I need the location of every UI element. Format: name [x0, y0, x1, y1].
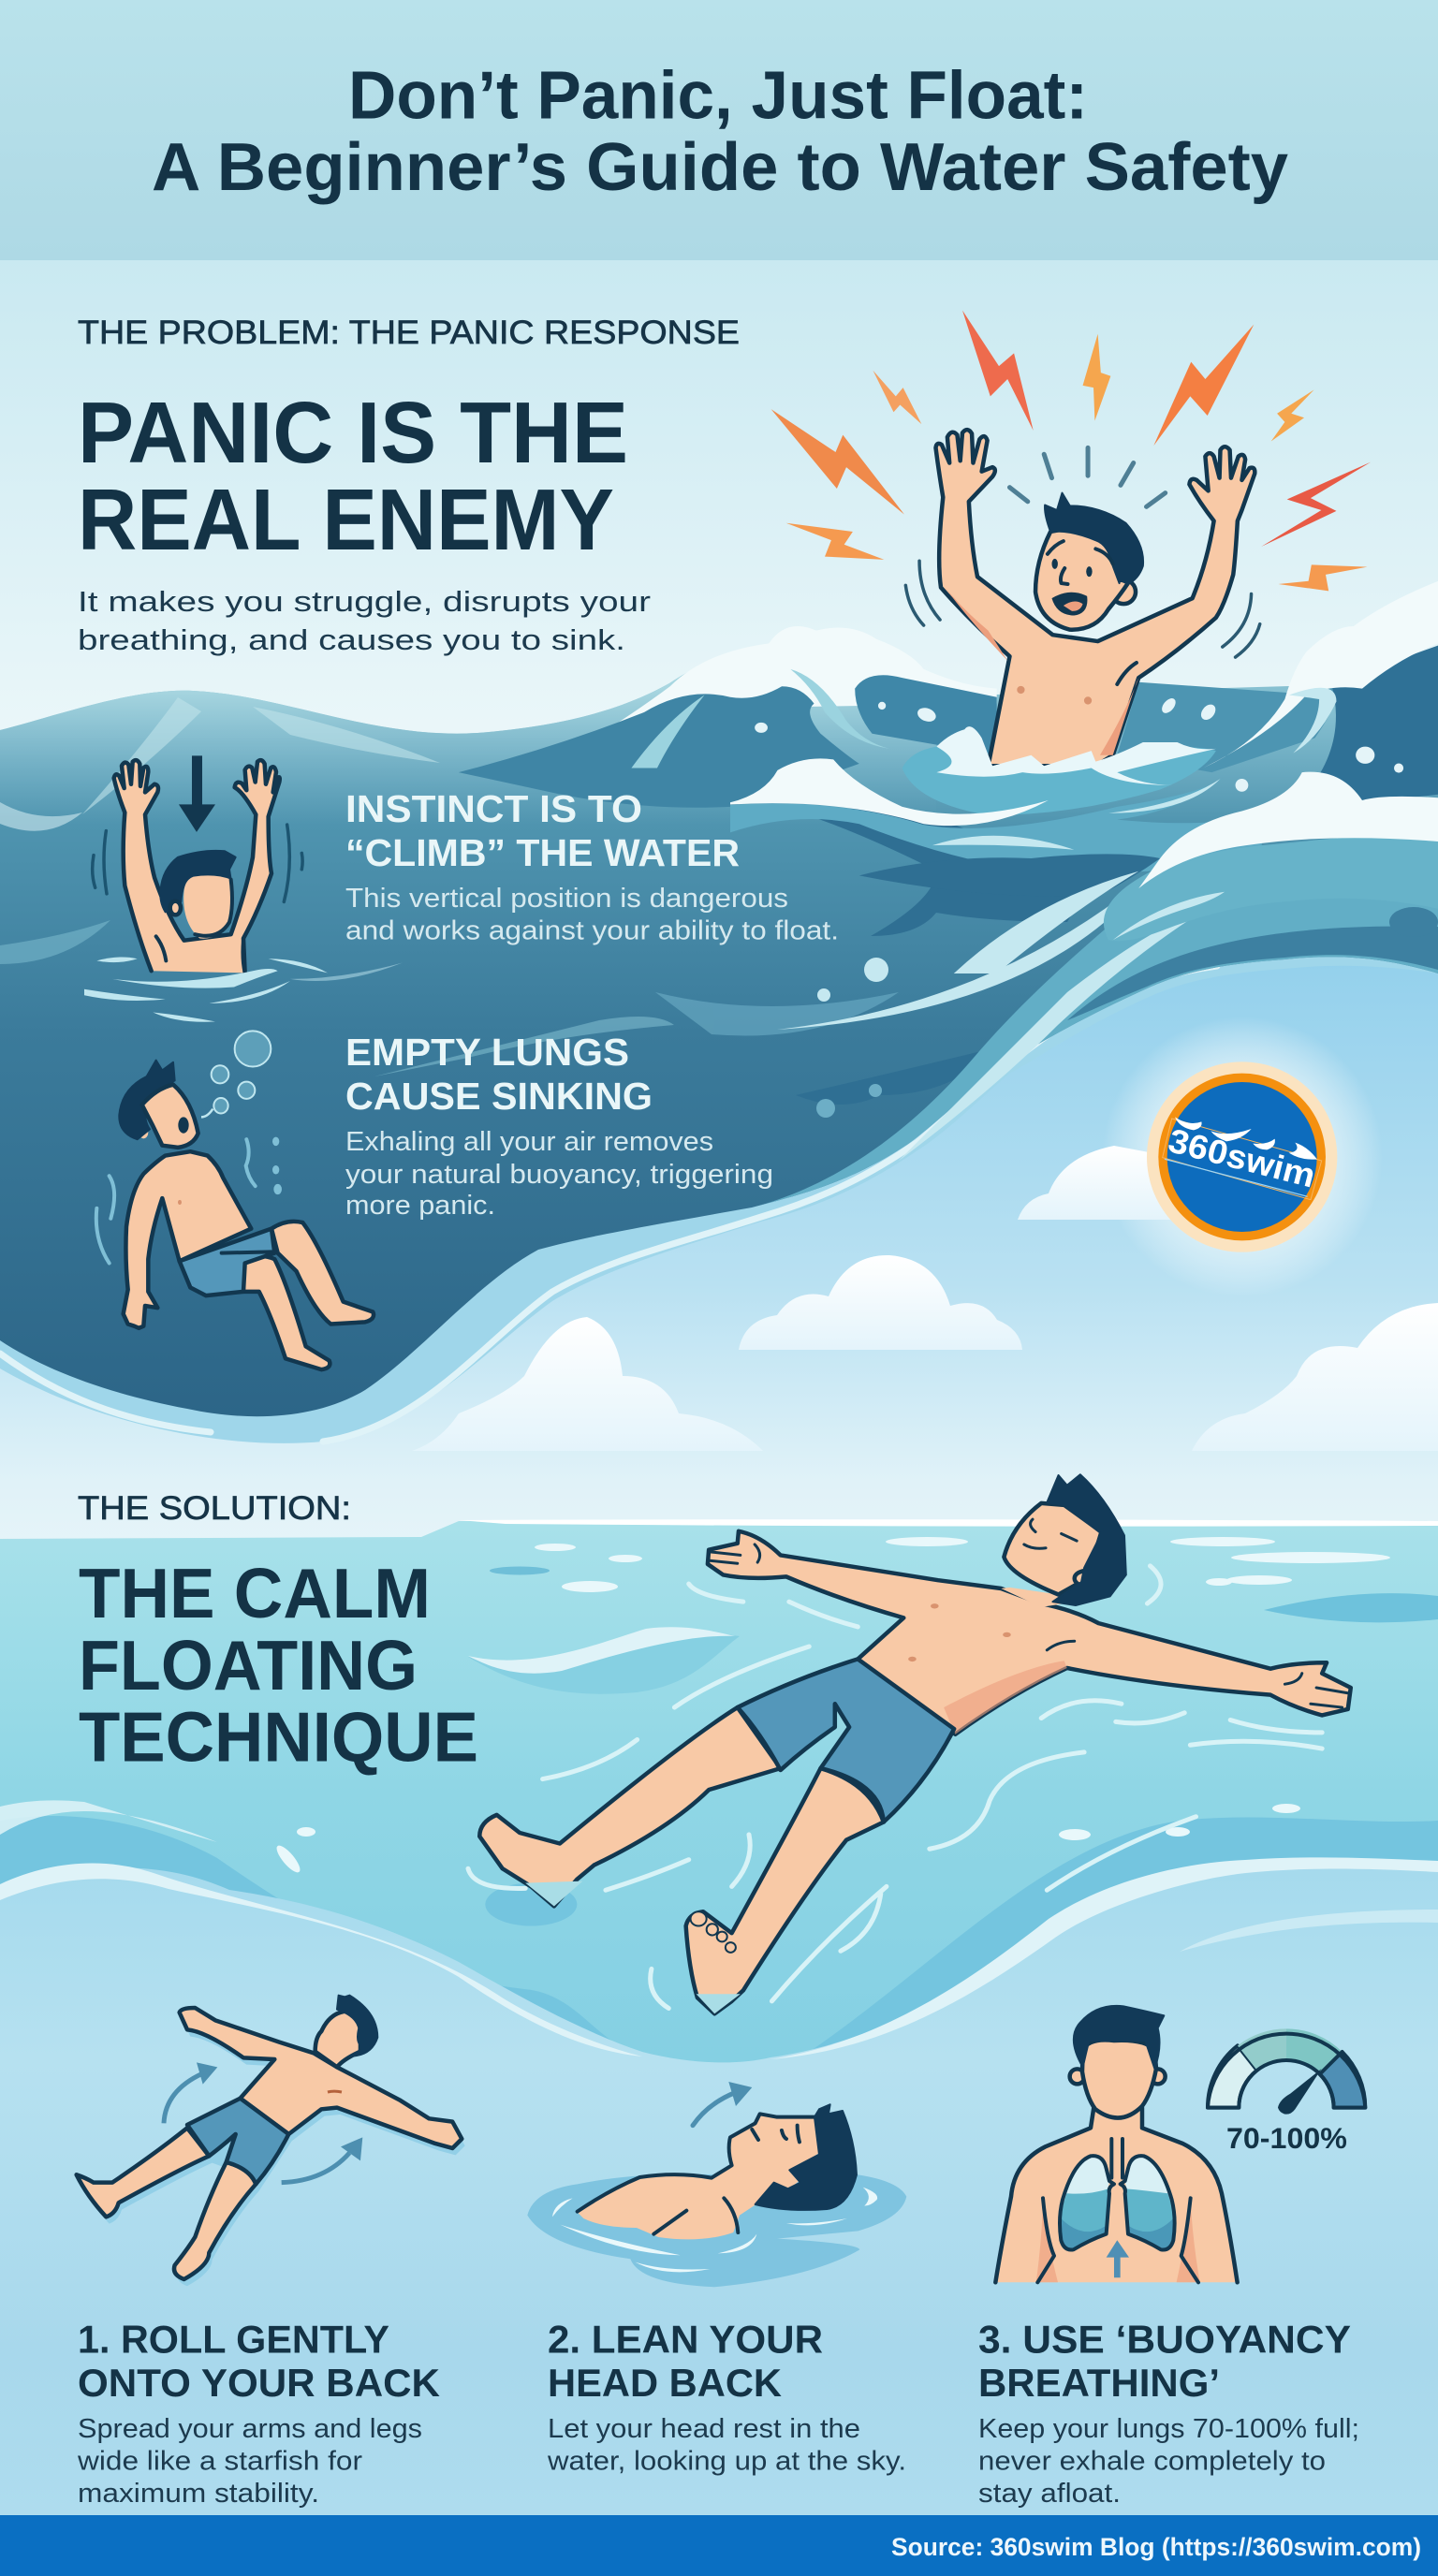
step 2 text: water, looking up at the sky.: [547, 2447, 906, 2477]
shoulder lines: [653, 2198, 738, 2234]
logo badge: 360swim: 360swim: [1165, 1120, 1319, 1195]
body and head: [578, 2114, 819, 2239]
instinct text block: INSTINCT IS TO: [345, 787, 642, 830]
arm lines: [1037, 2198, 1198, 2282]
second foot under water: [697, 1994, 741, 2013]
step 1 text: 1. ROLL GENTLY: [78, 2318, 389, 2361]
hair: [756, 2104, 857, 2210]
figure: empty lungs sinking: [96, 1031, 374, 1369]
torso and arm: [124, 1151, 251, 1328]
motion lines: [905, 561, 1260, 657]
gauge needle: [1278, 2069, 1322, 2115]
problem description: It makes you struggle, disrupts your: [78, 585, 651, 618]
left hill of wave: [0, 651, 936, 824]
empty lungs text block: your natural buoyancy, triggering: [345, 1160, 773, 1190]
panic figure: [730, 310, 1438, 973]
step 3 illustration: [995, 2006, 1365, 2282]
dark wave shapes: [796, 808, 1105, 1105]
sun glow: [1102, 1017, 1383, 1297]
right leg: [686, 1768, 884, 2013]
figure: climbing the water: [84, 755, 403, 1022]
shorts: [187, 2099, 288, 2184]
ear: [1075, 1571, 1100, 1587]
curved arrow 1: [164, 2062, 217, 2123]
face: [315, 2011, 361, 2067]
shorts fold: [222, 1251, 271, 1253]
solution eyebrow: THE SOLUTION:: [78, 1489, 351, 1527]
foot shadow: [485, 1883, 577, 1926]
step 1 text: [77, 2318, 440, 2509]
solution headline: [79, 1554, 478, 1777]
water swirls: [96, 1139, 256, 1263]
ear: [1111, 579, 1136, 604]
chest: [908, 1603, 1011, 1661]
outer wave white stripe: [0, 966, 1217, 1442]
lower leg: [242, 1256, 330, 1369]
empty lungs text block: CAUSE SINKING: [345, 1075, 653, 1118]
torso and arms: [708, 1531, 1351, 1734]
wave highlights, left: [0, 697, 899, 1076]
lightning bolts: [771, 310, 1371, 591]
hand lines: [709, 1544, 1348, 1707]
body: [995, 2108, 1238, 2282]
empty lungs text block: Exhaling all your air removes: [345, 1127, 713, 1157]
title: Don’t Panic, Just Float:: [348, 58, 1088, 133]
empty lungs text block: [345, 1031, 773, 1221]
step 2 text: Let your head rest in the: [548, 2414, 860, 2444]
teal band on right: [752, 840, 1438, 1208]
instinct text block: This vertical position is dangerous: [345, 884, 788, 914]
sky background: [0, 955, 1438, 1554]
problem headline: PANIC IS THE: [78, 384, 628, 481]
eyes: [752, 2126, 800, 2142]
white wave stripes: [777, 855, 1245, 1161]
open mouth: [178, 1117, 189, 1134]
oval dark mark: [1389, 907, 1438, 937]
problem eyebrow: THE PROBLEM: THE PANIC RESPONSE: [78, 314, 740, 351]
step 1 text: Spread your arms and legs: [78, 2414, 422, 2444]
hair: [1045, 493, 1143, 584]
solution headline: FLOATING: [79, 1626, 418, 1705]
upper leg behind: [271, 1222, 374, 1325]
splash around figure: [902, 747, 1216, 815]
step 1 text: maximum stability.: [78, 2479, 319, 2509]
ear: [139, 1126, 148, 1138]
torso and arms: [180, 2008, 462, 2148]
instinct text block: [345, 787, 839, 945]
ear: [170, 901, 181, 915]
step 3 text: stay afloat.: [978, 2479, 1121, 2509]
hair: [337, 1996, 377, 2056]
face: [1082, 2040, 1156, 2118]
bubbles: [212, 1031, 271, 1113]
panic wave tops behind figure: [459, 578, 1438, 811]
outer wave band: [0, 842, 1438, 1443]
puddle: [527, 2174, 906, 2287]
solution headline: THE CALM: [79, 1554, 431, 1632]
ocean waves: [0, 651, 1438, 1443]
up arrow: [1107, 2240, 1129, 2277]
title: A Beginner’s Guide to Water Safety: [152, 130, 1288, 205]
step 3 text: Keep your lungs 70-100% full;: [978, 2414, 1359, 2444]
step 2 text: HEAD BACK: [548, 2361, 782, 2405]
water ripples: [84, 957, 403, 1022]
figure shadow: [80, 2014, 465, 2286]
solution headline: TECHNIQUE: [79, 1698, 478, 1777]
facial features: [1048, 541, 1113, 584]
foot under water: [525, 1881, 582, 1906]
problem description: [78, 585, 651, 656]
logo badge: 360swim: [1147, 1061, 1337, 1252]
step 3 text: never exhale completely to: [978, 2447, 1326, 2477]
body shading: [944, 1661, 1067, 1734]
toes: [691, 1911, 736, 1953]
neck: [1001, 1588, 1064, 1607]
arms and torso: [114, 760, 280, 973]
hair: [119, 1061, 175, 1139]
step 3 text: 3. USE ‘BUOYANCY: [978, 2318, 1351, 2361]
lower panel: [0, 1860, 1438, 2527]
motion lines: [93, 825, 302, 901]
header band: [0, 0, 1438, 260]
hair: [1047, 1474, 1126, 1605]
tension ticks: [1009, 447, 1166, 506]
problem description: breathing, and causes you to sink.: [78, 623, 625, 656]
main water body: [0, 651, 1438, 1416]
arm shading: [946, 588, 1138, 755]
step 1 text: wide like a starfish for: [77, 2447, 362, 2477]
problem section background: [0, 260, 1438, 784]
hair: [1074, 2006, 1164, 2069]
calm water surface: [0, 1521, 1438, 2087]
deeper water wave, right lobe: [805, 1817, 1438, 2069]
shorts: [180, 1229, 274, 1295]
horizon line: [459, 1519, 1438, 1527]
legs: [77, 2128, 209, 2217]
source footer bar: [0, 2515, 1438, 2576]
step 1 text: ONTO YOUR BACK: [78, 2361, 440, 2405]
chest: [178, 1200, 182, 1205]
body shading: [1036, 2198, 1200, 2282]
water swooshes: [0, 1800, 1438, 2059]
left leg: [479, 1707, 781, 1906]
dark inner band: [1067, 927, 1438, 1020]
clouds: [412, 1146, 1438, 1451]
step 1 illustration: [77, 1996, 465, 2286]
face: [1004, 1503, 1101, 1595]
arms and torso: [935, 430, 1255, 766]
top outline: [578, 2114, 814, 2212]
face: [142, 1085, 198, 1148]
jaw line: [195, 880, 232, 936]
eyes and mouth: [1024, 1519, 1077, 1548]
step 2 illustration: [527, 2082, 906, 2287]
big right foam crest: [1138, 772, 1438, 888]
ripples: [552, 2188, 877, 2272]
face: [1035, 527, 1130, 630]
down arrow: [179, 755, 215, 832]
hair: [160, 851, 236, 912]
big right teal wave: [1104, 838, 1438, 941]
curved arrow 2: [282, 2137, 362, 2183]
instinct text block: “CLIMB” THE WATER: [345, 831, 740, 874]
problem headline: REAL ENEMY: [78, 471, 614, 568]
armpit line: [1117, 663, 1137, 684]
gauge: [1208, 2028, 1365, 2115]
instinct text block: and works against your ability to float.: [345, 915, 839, 945]
chest: [1017, 686, 1092, 705]
empty lungs text block: EMPTY LUNGS: [345, 1031, 629, 1074]
breath: [201, 1109, 213, 1117]
front foam wave: [730, 758, 1049, 826]
gauge label: 70-100%: [1226, 2122, 1347, 2155]
source text: Source: 360swim Blog (https://360swim.com): [891, 2533, 1421, 2561]
floating figure: [468, 1474, 1351, 2013]
empty lungs text block: more panic.: [345, 1191, 495, 1221]
head-tilt arrow: [693, 2082, 752, 2126]
armpit mark: [328, 2090, 342, 2093]
water patches and ripples: [273, 1537, 1438, 1876]
armpit lines: [156, 936, 245, 973]
step 2 text: [547, 2318, 906, 2477]
step 2 text: 2. LEAN YOUR: [548, 2318, 823, 2361]
lungs: [1060, 2139, 1175, 2250]
step 3 text: BREATHING’: [978, 2361, 1220, 2405]
step 3 text: [978, 2318, 1359, 2509]
ears: [1070, 2069, 1085, 2084]
ripple streaks: [468, 1566, 1322, 2009]
swim shorts: [738, 1659, 954, 1822]
problem headline: [78, 384, 628, 568]
face: [183, 875, 232, 939]
deeper water wave, left lobe: [0, 1816, 712, 2069]
